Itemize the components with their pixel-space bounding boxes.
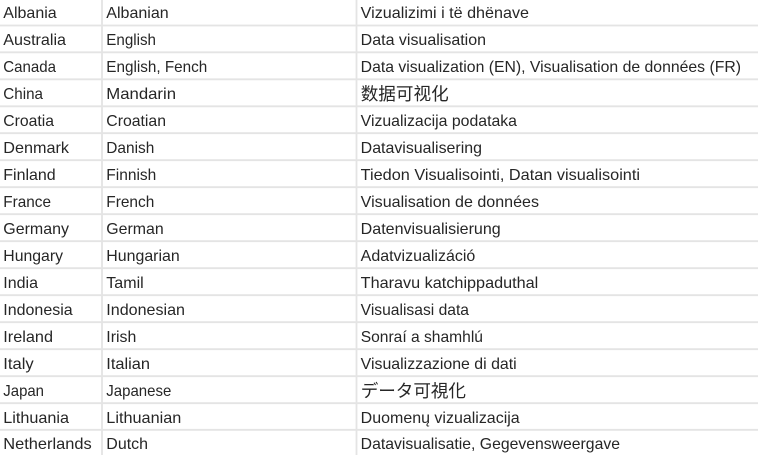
row: Denmark: Danish [106,140,154,157]
row: Italy: Italian [106,356,150,373]
row: Finland: Finnish [106,167,156,184]
row: Italy [3,356,517,373]
row: Ireland: Sonraí a shamhlú [361,329,483,346]
row: Netherlands: Datavisualisatie, Gegevensweergave [361,436,620,453]
row: India: Tharavu katchippaduthal [361,275,538,292]
row: France [3,194,539,211]
row: Italy: Visualizzazione di dati [361,356,517,373]
row: Japan [3,378,466,403]
row: France: Visualisation de données [361,194,539,211]
row: Indonesia: Indonesia [3,302,73,319]
row: Germany [3,221,501,238]
row: Netherlands: Netherlands [3,436,92,453]
row: Canada: English, Fench [106,59,207,76]
row: Australia: English [106,32,156,49]
row: Ireland: Ireland [3,329,53,346]
row: Hungary: Adatvizualizáció [361,248,476,265]
row: Finland [3,167,640,184]
row: Indonesia: Visualisasi data [361,302,469,319]
row: Australia: Data visualisation [361,32,486,49]
row: Albania [3,5,529,22]
row: Finland: Finland [3,167,56,184]
row: Hungary: Hungary [3,248,63,265]
row: Croatia: Croatia [3,113,54,130]
row: Netherlands: Dutch [106,436,148,453]
row: India [3,275,538,292]
row: Finland: Tiedon Visualisointi, Datan visualisointi [361,167,640,184]
row: Australia [3,32,486,49]
row: Japan: Japan [3,383,44,400]
row: Hungary: Hungarian [106,248,180,265]
row: India: India [3,275,38,292]
row: Indonesia: Indonesian [106,302,185,319]
row: Netherlands [3,436,620,453]
row: Albania: Vizualizimi i të dhënave [361,5,529,22]
row: Ireland: Irish [106,329,136,346]
row: Italy: Italy [3,356,34,373]
row: Denmark: Datavisualisering [361,140,482,157]
row: Croatia [3,113,517,130]
row: Canada [3,59,741,76]
row: China: China [3,86,43,103]
row: Lithuania [3,410,520,427]
row: Croatia: Vizualizacija podataka [361,113,517,130]
row: Denmark [3,140,482,157]
row: Germany: Germany [3,221,69,238]
row: Lithuania: Duomenų vizualizacija [361,410,520,427]
row: India: Tamil [106,275,144,292]
row: China: 数据可视化 [361,81,449,106]
row: France: French [106,194,154,211]
row: Lithuania: Lithuanian [106,410,181,427]
row: Ireland [3,329,483,346]
row: Australia: Australia [3,32,66,49]
row: Croatia: Croatian [106,113,166,130]
row: Germany: Datenvisualisierung [361,221,501,238]
row: Indonesia [3,302,469,319]
row: Albania: Albanian [106,5,169,22]
row: Germany: German [106,221,164,238]
row: Japan: Japanese [106,383,171,400]
row: France: France [3,194,51,211]
row: Japan: データ可視化 [361,378,466,403]
row: Canada: Data visualization (EN), Visualisation de données (FR) [361,59,741,76]
row: Albania: Albania [3,5,57,22]
row: China: Mandarin [106,86,176,103]
row: Denmark: Denmark [3,140,69,157]
row: China [3,81,449,106]
row: Lithuania: Lithuania [3,410,69,427]
row: Hungary [3,248,476,265]
row: Canada: Canada [3,59,56,76]
